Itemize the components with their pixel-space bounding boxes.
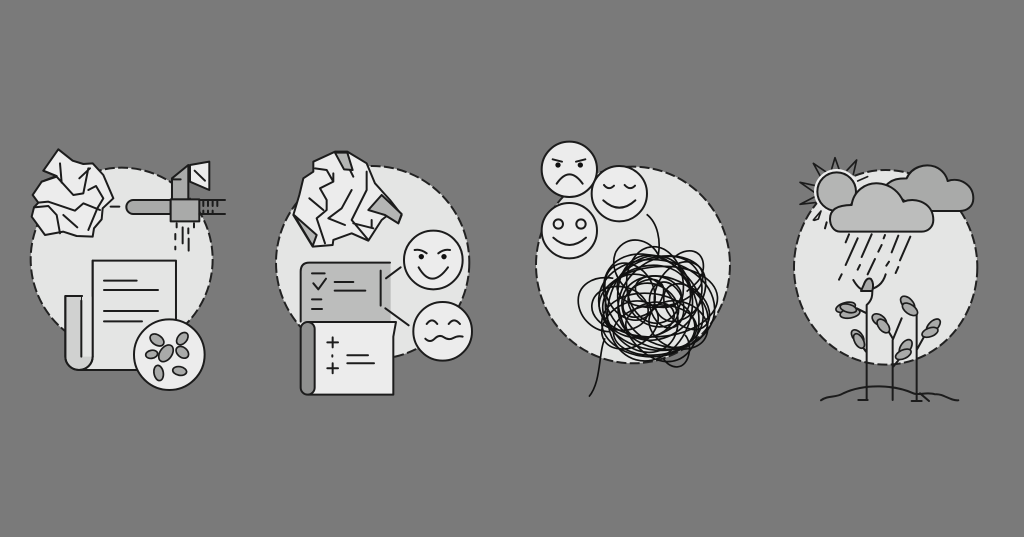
panel: waste paper to seed paper (31, 149, 225, 390)
icon: crumpled paper ball (293, 152, 402, 247)
panel: tangled emotions (536, 142, 730, 397)
icon: calm face (592, 166, 647, 221)
icon: tangled thread (578, 214, 722, 397)
icon: front cloud (830, 183, 933, 232)
icon: rain (825, 222, 910, 280)
icon: queasy smiley (413, 302, 472, 361)
icon: scroll with plus signs (301, 322, 396, 395)
icon: angry face (542, 142, 597, 197)
icon: sun (800, 158, 868, 220)
panel: weather and plants (794, 158, 977, 401)
dashed circle background (276, 166, 469, 359)
icon: seeds circle (134, 319, 205, 390)
dashed circle background (31, 168, 213, 351)
icon: shredding machine (111, 162, 225, 251)
icon: smiling face (542, 203, 597, 258)
leaf clusters (835, 294, 943, 362)
icon: checklist sheet (301, 263, 391, 322)
icon: rear cloud (885, 165, 973, 211)
icon: mischievous smiley (404, 231, 463, 289)
icon: crumpled paper (32, 149, 113, 237)
icon: plants (821, 274, 958, 401)
panel: paper and moods (276, 152, 472, 395)
dashed circle background (794, 170, 977, 365)
connector lines (385, 267, 409, 325)
icon: document scroll (65, 261, 176, 370)
dashed circle background (536, 167, 730, 363)
